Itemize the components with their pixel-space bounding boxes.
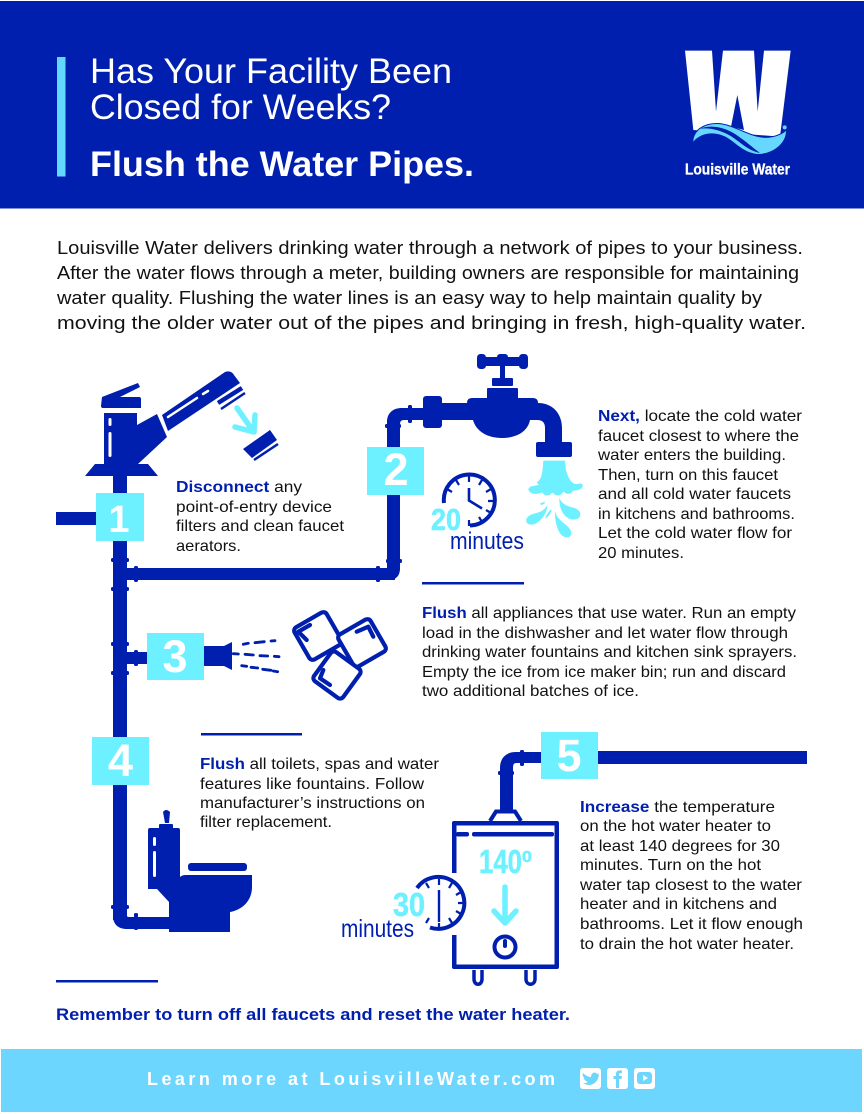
step 5 text: to drain the hot water heater. <box>580 936 794 953</box>
step 2 text: water enters the building. <box>597 447 786 464</box>
step 2 text: in kitchens and bathrooms. <box>598 506 795 523</box>
icon: youtube <box>634 1068 655 1089</box>
step 1 text: point-of-entry device <box>176 499 332 516</box>
step number badge 2: 2 <box>383 444 409 495</box>
Louisville Water logo <box>685 51 791 179</box>
step 4 text: manufacturer’s instructions on <box>200 795 425 812</box>
title: Closed for Weeks? <box>90 87 391 127</box>
water spray dashes <box>233 641 279 672</box>
step 5 text: bathrooms. Let it flow enough <box>580 916 803 933</box>
timer: 30 minutes <box>341 877 464 943</box>
step 4 text: Flush all toilets, spas and water <box>200 756 439 773</box>
step 5 text <box>579 799 803 953</box>
step number badge 4: 4 <box>108 735 133 786</box>
step 3 text: two additional batches of ice. <box>422 683 639 700</box>
intro paragraph <box>56 238 806 333</box>
header banner <box>0 1 864 208</box>
step number badge 2 <box>367 444 424 495</box>
Louisville Water logo: Louisville Water <box>685 162 790 178</box>
intro paragraph: moving the older water out of the pipes and bringing in fresh, high-quality water. <box>57 313 806 333</box>
step 4 text: features like fountains. Follow <box>200 776 425 793</box>
step 3 text: Empty the ice from ice maker bin; run and discard <box>422 664 786 681</box>
step number badge 5: 5 <box>556 730 582 781</box>
step number badge 5 <box>541 730 598 781</box>
timer: 30 minutes: minutes <box>341 915 414 943</box>
step number badge 1 <box>96 493 144 541</box>
ice cubes <box>293 611 387 700</box>
step 2 text: and all cold water faucets <box>598 486 791 503</box>
footer link text: Learn more at LouisvilleWater.com <box>147 1069 555 1089</box>
step 1 text <box>176 479 345 555</box>
step number badge 4 <box>92 735 149 786</box>
step 5 text: at least 140 degrees for 30 <box>580 838 780 855</box>
title: Has Your Facility Been <box>90 51 452 91</box>
timer: 20 minutes <box>431 475 524 555</box>
step 4 text <box>200 756 439 831</box>
step 5 text: Increase the temperature <box>580 799 775 816</box>
step 5 pipe and water heater <box>452 750 807 984</box>
divider above step 3 text <box>422 582 524 584</box>
main pipe network <box>56 405 425 930</box>
intro paragraph: After the water flows through a meter, building owners are responsible for maintaining <box>57 263 799 283</box>
step 4 text: filter replacement. <box>200 814 332 831</box>
accent bar <box>57 57 66 176</box>
step 2 text: Next, locate the cold water <box>598 408 802 425</box>
footer band <box>1 1049 862 1112</box>
step 5 text: on the hot water heater to <box>580 818 771 835</box>
timer: 20 minutes: 20 <box>431 502 461 537</box>
step 5 text: heater and in kitchens and <box>580 896 777 913</box>
step 5 text: minutes. Turn on the hot <box>580 857 762 874</box>
arrow down to aerator <box>235 408 255 432</box>
step 2 text: 20 minutes. <box>598 545 684 562</box>
140 degrees label and arrow <box>479 843 532 923</box>
step 1 faucet icon <box>85 371 278 476</box>
intro paragraph: Louisville Water delivers drinking water through a network of pipes to your business. <box>57 238 803 258</box>
step number badge 1: 1 <box>108 499 130 541</box>
step 2 faucet icon <box>423 354 572 457</box>
step 2 text <box>597 408 802 562</box>
step 1 text: aerators. <box>176 538 241 555</box>
140 degrees label and arrow: 140 <box>479 843 522 880</box>
intro paragraph: water quality. Flushing the water lines is an easy way to help maintain quality by <box>56 288 763 308</box>
divider above reminder <box>56 980 158 982</box>
step number badge 3: 3 <box>162 631 188 682</box>
power button <box>494 936 516 958</box>
step 2 text: faucet closest to where the <box>598 428 799 445</box>
step 3 text <box>422 605 797 700</box>
divider above step 4 text <box>201 733 302 736</box>
icon: facebook <box>607 1068 628 1089</box>
step number badge 3 <box>147 631 204 682</box>
step 1 text: Disconnect any <box>176 479 302 496</box>
step 2 text: Then, turn on this faucet <box>598 467 779 484</box>
icon: twitter <box>580 1068 601 1089</box>
step 3 spray nozzle <box>204 641 279 672</box>
title: Flush the Water Pipes. <box>90 144 474 184</box>
140 degrees label and arrow: 0 <box>522 849 532 866</box>
step 4 toilet icon <box>148 810 252 932</box>
step 5 text: water tap closest to the water <box>579 877 802 894</box>
step 3 text: drinking water fountains and kitchen sink sprayers. <box>422 644 797 661</box>
step 3 text: load in the dishwasher and let water flow through <box>422 625 788 642</box>
title <box>90 51 474 184</box>
timer: 20 minutes: minutes <box>450 528 524 555</box>
step 1 text: filters and clean faucet <box>176 518 345 535</box>
reminder text: Remember to turn off all faucets and reset the water heater. <box>56 1005 570 1024</box>
timer: 30 minutes: 30 <box>393 886 425 923</box>
step 3 text: Flush all appliances that use water. Run an empty <box>422 605 796 622</box>
water splash <box>526 461 583 537</box>
detached aerator <box>243 430 277 458</box>
step 2 text: Let the cold water flow for <box>598 525 792 542</box>
